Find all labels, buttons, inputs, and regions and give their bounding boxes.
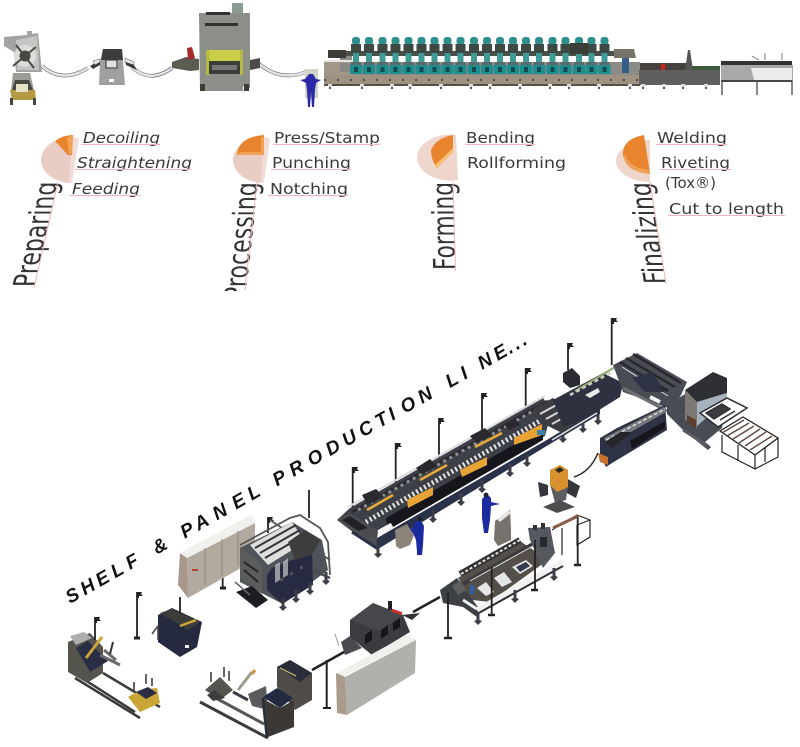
stage: finalizing [616,129,785,284]
steps: (Tox®) [665,174,716,192]
motor block [288,530,320,560]
operator figure [300,69,321,107]
steps [268,129,380,198]
steps: Press/Stamp [274,129,380,147]
operator figure [405,517,424,555]
pie icon [417,135,458,181]
steps [656,129,785,218]
machine: outfeed table frame [720,417,778,469]
steps: Rollforming [467,154,566,172]
control pedestal [395,524,414,549]
machine: straightener [90,49,137,85]
machine: first decoiler with feeder [68,632,160,718]
steps: Punching [272,154,351,172]
steps: Welding [657,129,727,147]
orange stripes [367,433,502,510]
roller ladders [366,418,545,522]
left end [440,578,480,617]
inner bed [458,541,548,602]
isometric line: lower assembly [68,490,590,738]
stage: processing [224,132,380,291]
rear table frame [552,515,590,555]
machine: transverse transfer section [613,353,687,411]
feed-in end [337,513,378,549]
steps: Feeding [72,180,140,198]
pie icon [41,135,79,183]
machine: punching station [235,515,330,611]
steps: Bending [466,129,535,147]
blue body [267,552,313,604]
steps: Notching [270,180,348,198]
light poles [95,490,309,640]
machine mass [240,522,328,604]
gearboxes [362,418,520,505]
pie icon [233,135,270,183]
heading: Forming [426,182,463,270]
steps [465,129,566,172]
black bays and orange guards [386,428,543,530]
white upper deck [250,522,305,565]
machine: welding station [667,372,747,450]
legs [374,412,602,558]
machine: press station [335,601,420,655]
strip material loops [42,63,306,76]
steps: Riveting [661,154,730,172]
machine: leveller [152,608,202,657]
upper rails [460,540,520,574]
machine: roll forming unit [440,515,590,625]
lower frame [312,570,330,578]
stage: preparing [7,129,192,288]
control console [494,510,511,546]
heading: Preparing [7,182,66,287]
heading: Processing [218,182,266,300]
tower [528,527,555,568]
gantry section [553,373,623,427]
isometric title: SHELF & PANEL PRODUCTION LINE... [62,330,531,608]
top production line diagram [4,3,793,107]
arch frame [240,515,330,575]
main deck [337,398,552,536]
steps: Decoiling [83,129,160,147]
isometric line: upper long assembly [337,318,778,558]
machine: finishing and cut-off section [639,50,720,89]
heading: Finalizing [623,182,674,284]
machine: short branch conveyor [574,405,667,477]
steps [70,129,192,198]
navy lower rail [372,408,600,549]
machine: run-out table [721,53,793,95]
side shelves [240,547,262,594]
machine: coil decoiler with orange cabinet [538,465,580,513]
material pipe [312,597,440,670]
steps: Cut to length [669,200,784,218]
stage: forming [417,129,566,271]
electrical cabinet [336,635,416,715]
machine: decoiler [4,31,42,105]
control cabinet [178,514,255,598]
operator figure [482,493,500,533]
machine: roll forming mill [324,37,640,89]
open transfer section [534,398,585,433]
machine: long conveyor body [337,367,623,558]
light pole [323,660,331,708]
machine: press [172,3,260,91]
white front rail [477,561,563,610]
steps: Straightening [77,154,192,172]
light poles [444,517,581,638]
outer white rail [348,396,545,507]
machine: second decoiler with feeder [200,660,312,738]
light poles [353,318,612,507]
pie icon [616,135,650,182]
